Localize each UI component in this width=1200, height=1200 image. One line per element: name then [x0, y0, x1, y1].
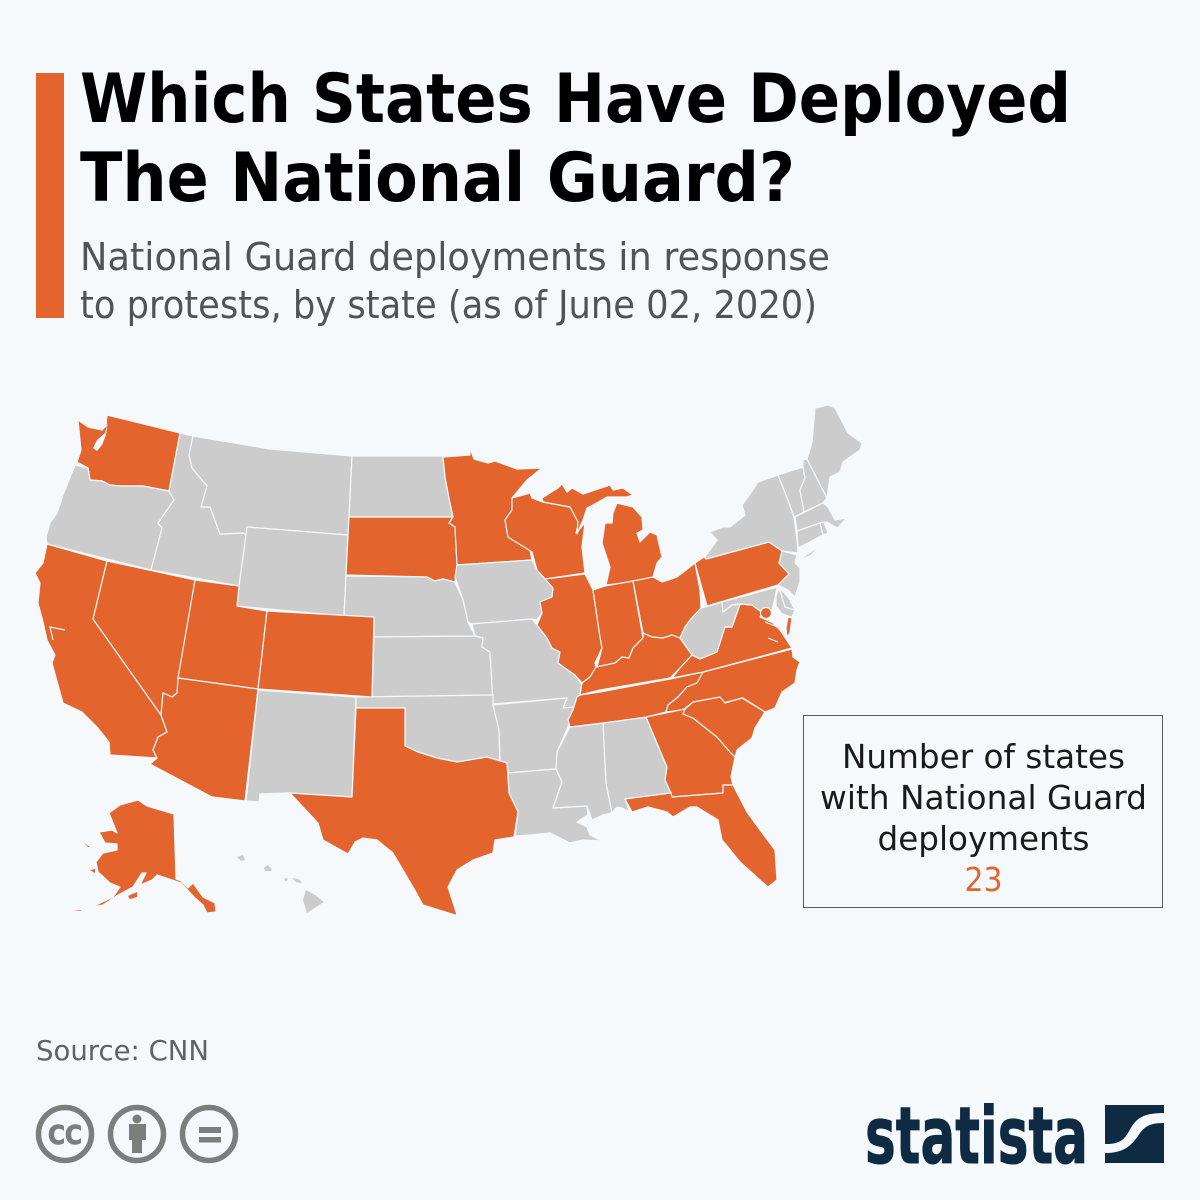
callout: number of states: with National Guard — [820, 778, 1147, 817]
Virginia — [672, 604, 792, 678]
subtitle: National Guard deployments in response — [80, 235, 830, 279]
New Mexico — [246, 690, 356, 802]
Long Island — [798, 545, 822, 560]
Virginia eastern shore — [786, 617, 792, 637]
New Hampshire — [800, 459, 827, 512]
West Virginia — [680, 602, 740, 659]
Georgia — [646, 709, 735, 797]
Chesapeake rivers — [765, 622, 780, 628]
Alaska islands — [73, 843, 137, 911]
Pennsylvania — [695, 542, 789, 606]
subtitle: to protests, by state (as of June 02, 2020) — [80, 283, 817, 327]
Kansas — [372, 636, 493, 697]
Washington — [77, 415, 180, 491]
Utah — [178, 580, 267, 689]
title: The National Guard? — [80, 139, 795, 218]
statista wordmark: statista — [865, 1092, 1088, 1182]
California — [35, 544, 167, 758]
Hawaii — [237, 855, 324, 913]
Alabama — [603, 717, 671, 813]
Texas — [290, 708, 518, 915]
Michigan lower peninsula — [602, 503, 662, 585]
Nebraska — [344, 576, 475, 637]
Maryland eastern shore — [776, 588, 795, 617]
North Carolina — [666, 649, 800, 712]
Arkansas — [493, 698, 575, 773]
Vermont — [778, 467, 805, 517]
source: Source: CNN — [36, 1034, 209, 1067]
Tennessee — [568, 672, 703, 727]
New York — [705, 475, 798, 559]
Connecticut — [797, 523, 823, 548]
title: Which States Have Deployed — [80, 60, 1071, 139]
callout: number of states: deployments — [878, 819, 1090, 858]
callout: number of states: 23 — [964, 860, 1002, 899]
Wyoming — [237, 527, 348, 616]
callout: number of states — [804, 716, 1162, 908]
Illinois — [537, 574, 602, 683]
Minnesota — [443, 448, 542, 565]
Puget Sound — [93, 421, 108, 451]
Oregon — [46, 465, 174, 570]
Florida — [625, 785, 777, 887]
Arizona — [150, 678, 258, 801]
Indiana — [593, 581, 643, 667]
subtitle — [80, 235, 830, 327]
title — [80, 60, 1071, 218]
Delaware — [779, 587, 795, 610]
Montana — [189, 436, 352, 535]
icon: statista logo — [1105, 1105, 1164, 1163]
South Dakota — [346, 517, 457, 582]
Ohio — [633, 563, 701, 638]
Rhode Island — [820, 522, 828, 535]
Oklahoma — [356, 695, 500, 762]
South Carolina — [683, 697, 765, 757]
Mississippi — [553, 723, 612, 820]
Maryland — [722, 587, 777, 613]
Idaho — [151, 433, 247, 586]
Louisiana — [508, 769, 602, 843]
New Jersey — [778, 551, 800, 597]
North Dakota — [349, 456, 453, 517]
Nevada — [93, 561, 195, 715]
accent bar — [36, 73, 64, 318]
Michigan upper peninsula — [542, 484, 633, 534]
San Francisco Bay — [50, 627, 65, 640]
icon: creative commons: CC — [48, 1121, 82, 1151]
Alaska — [92, 800, 216, 913]
Wisconsin — [505, 493, 585, 579]
Washington D.C. — [760, 608, 772, 618]
Iowa — [455, 560, 553, 624]
map: United States by National Guard deployment — [35, 405, 862, 915]
Missouri — [472, 619, 582, 708]
Maine — [807, 405, 862, 498]
Colorado — [258, 611, 374, 697]
Kentucky — [580, 633, 692, 695]
callout: number of states: Number of states — [842, 737, 1125, 776]
icon: attribution — [110, 1108, 164, 1160]
icon: no derivatives — [182, 1108, 236, 1160]
icon: creative commons — [38, 1108, 92, 1160]
Massachusetts — [795, 503, 847, 531]
